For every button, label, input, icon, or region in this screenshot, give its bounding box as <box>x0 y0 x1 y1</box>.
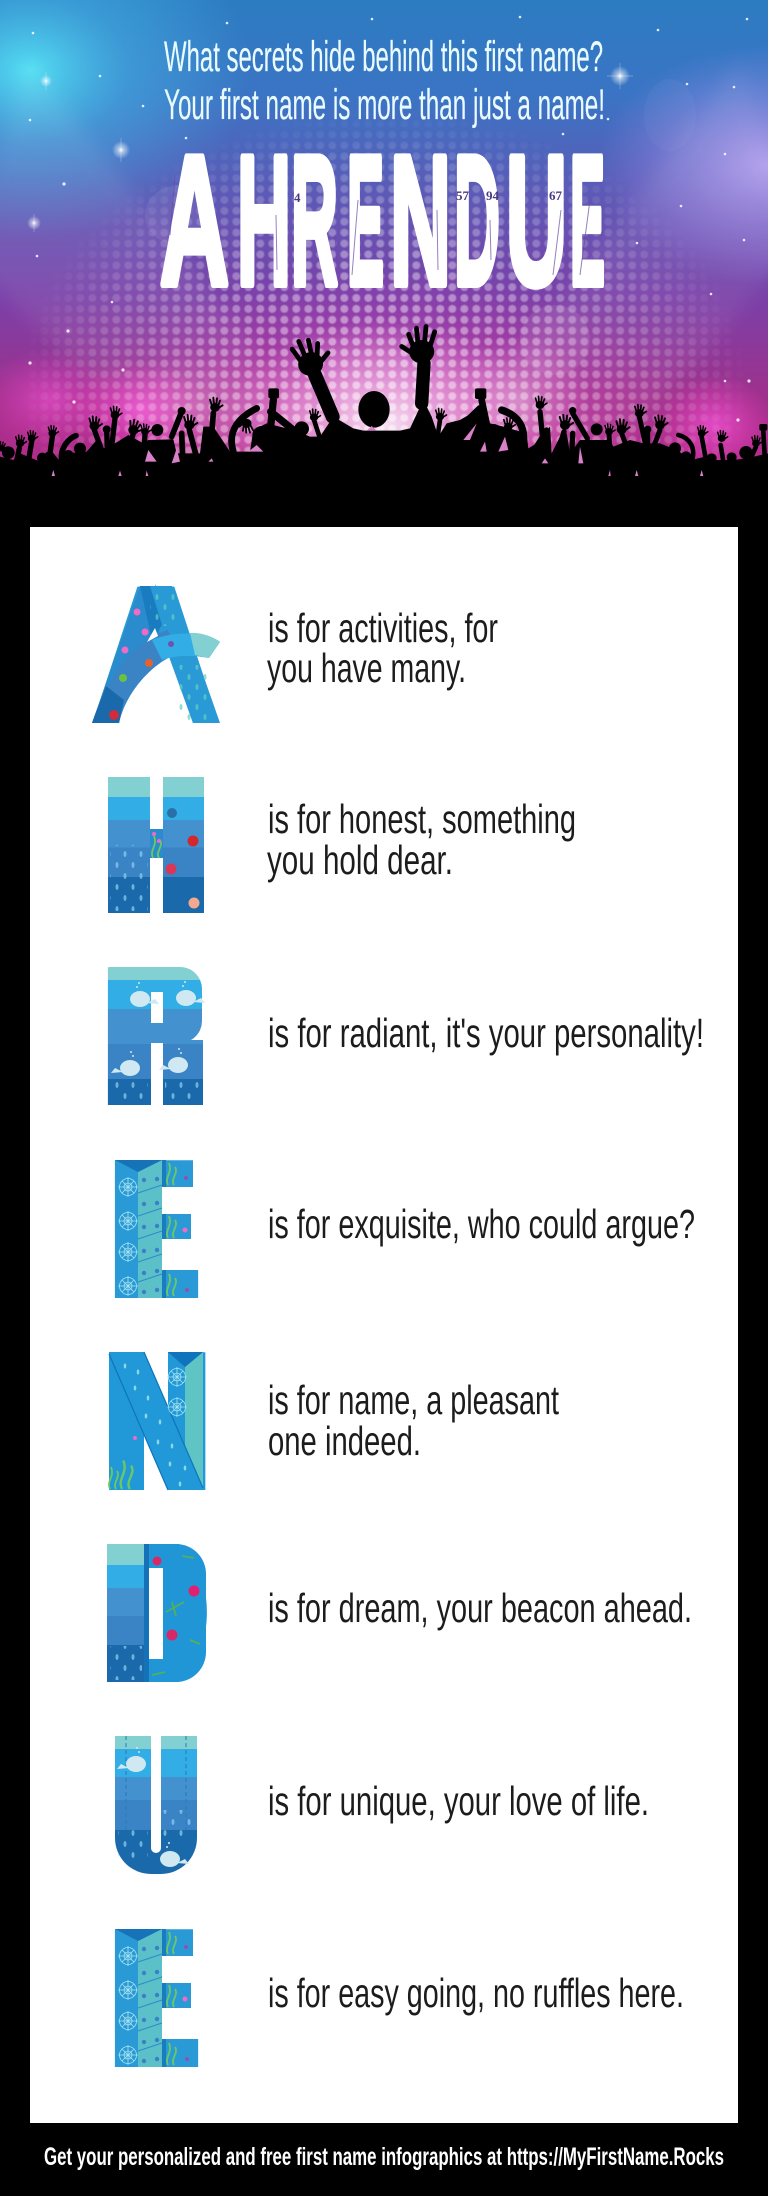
title: first name: R <box>291 117 338 323</box>
title: first name: 94 <box>486 188 500 203</box>
text: letter H meaning <box>267 796 576 883</box>
text: letter H meaning: is for honest, something <box>268 796 576 842</box>
icon: illustrated letter H: H <box>107 752 205 939</box>
text: E <box>570 117 605 323</box>
icon: illustrated letter D: D <box>105 1516 206 1711</box>
letter row D <box>105 1516 692 1711</box>
title: first name: E <box>347 117 384 323</box>
title: first name: 4 <box>294 190 301 205</box>
title: first name: 57 <box>456 188 470 203</box>
text: letter N meaning <box>268 1377 559 1464</box>
title: first name: D <box>454 117 500 323</box>
sparkles <box>27 16 751 422</box>
icon: illustrated letter N: N <box>107 1324 208 1519</box>
dot-matrix light wall <box>41 126 730 460</box>
crowd mass <box>0 400 768 530</box>
intro text <box>164 33 605 129</box>
text: letter N meaning: is for name, a pleasant <box>268 1377 559 1423</box>
text: letter N meaning: one indeed. <box>268 1418 421 1464</box>
letter row R <box>106 940 704 1134</box>
crowd silhouette <box>0 327 768 530</box>
title: first name: 67 <box>549 188 562 203</box>
icon: illustrated letter R: R <box>106 940 196 1134</box>
letter row E (second) <box>113 1902 684 2096</box>
title: first name: A <box>160 117 229 323</box>
text: letter A meaning: is for activities, for <box>268 605 498 651</box>
text: letter A meaning <box>267 605 498 691</box>
icon: illustrated letter U: U <box>113 1705 200 1899</box>
panel: white letters panel <box>30 527 738 2123</box>
title: first name: U <box>506 117 567 323</box>
text: letter H meaning: you hold dear. <box>267 837 453 883</box>
letter row A <box>92 557 498 753</box>
footer band of crowd floor <box>0 477 768 527</box>
title: first name: H <box>237 117 291 323</box>
icon: illustrated letter E: E <box>113 1133 197 1327</box>
icon: illustrated letter E: E <box>113 1902 197 2096</box>
title: first name <box>160 117 605 323</box>
text: letter A meaning: you have many. <box>267 645 466 691</box>
letter row U <box>105 1705 649 1899</box>
header stage background <box>0 0 768 530</box>
title: first name: N <box>390 117 451 323</box>
icon: illustrated letter A: A <box>99 557 213 753</box>
letter row H <box>107 752 576 939</box>
letter row E <box>113 1133 695 1327</box>
letter row N <box>107 1324 559 1519</box>
